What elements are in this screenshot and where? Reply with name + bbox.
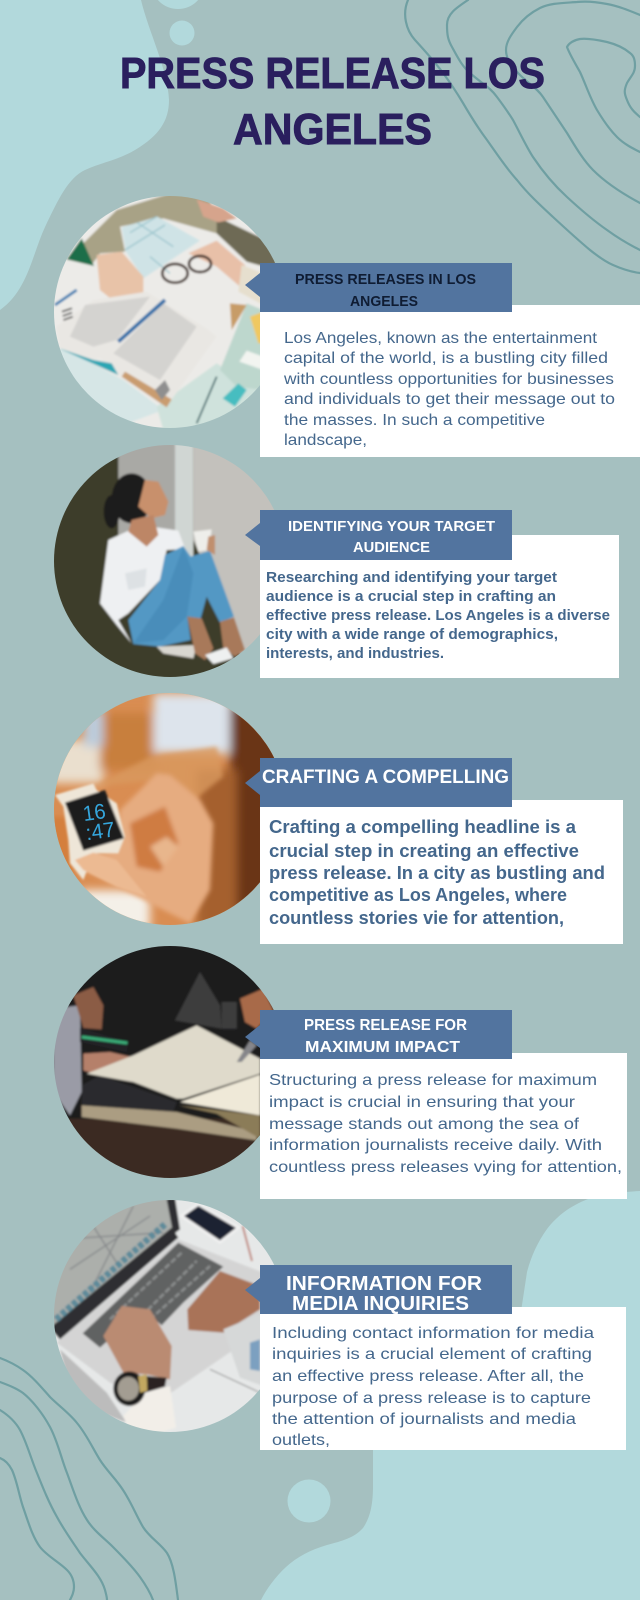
heading 4: MAXIMUM IMPACT: [305, 1039, 460, 1056]
panel 5: body box: [260, 1307, 626, 1450]
heading 1: PRESS RELEASES IN LOS: [295, 271, 476, 288]
watch face time: 16: [81, 799, 107, 826]
body text 3: [269, 817, 605, 928]
heading 3: CRAFTING A COMPELLING: [262, 767, 509, 788]
body text 5: the attention of journalists and media: [272, 1411, 576, 1428]
panel 5: header bar: [245, 1265, 512, 1315]
photo: open book with glasses on desk: [54, 196, 275, 428]
body text 1: and individuals to get their message out to: [284, 391, 615, 408]
panel 3: body box: [260, 800, 623, 944]
body text 3: Crafting a compelling headline is a: [269, 817, 577, 837]
photo: hands writing in notebook: [54, 946, 274, 1178]
top circles: [151, 0, 205, 46]
body text 3: countless stories vie for attention,: [269, 908, 564, 928]
heading 5: MEDIA INQUIRIES: [292, 1293, 469, 1315]
body text 2: Researching and identifying your target: [266, 569, 557, 586]
heading 2: IDENTIFYING YOUR TARGET: [288, 518, 495, 535]
panel 4: body box: [260, 1053, 627, 1199]
heading 1: [295, 271, 476, 310]
body text 2: city with a wide range of demographics,: [266, 626, 558, 643]
photo: hand touching smartwatch: [54, 693, 274, 925]
body text 4: countless press releases vying for attention,: [269, 1159, 622, 1176]
heading 5: [286, 1273, 483, 1315]
heading 2: [288, 518, 495, 556]
body text 2: [266, 569, 610, 662]
body text 2: effective press release. Los Angeles is a diverse: [266, 607, 610, 624]
panel 1: body box: [260, 305, 640, 457]
panel 4: header bar: [245, 1010, 512, 1059]
photo: hands typing on laptop: [54, 1200, 274, 1432]
body text 1: with countless opportunities for businesses: [283, 371, 614, 388]
body text 4: Structuring a press release for maximum: [269, 1072, 597, 1089]
watch face time: :47: [84, 817, 116, 845]
panel 3: header bar: [245, 758, 512, 807]
watch face time: [84, 804, 113, 840]
body text 1: capital of the world, is a bustling city filled: [284, 350, 608, 367]
body text 3: crucial step in creating an effective: [269, 841, 579, 861]
body text 4: information journalists receive daily. With: [269, 1137, 602, 1154]
body text 5: outlets,: [272, 1432, 330, 1449]
body text 5: [272, 1325, 594, 1449]
body text 4: impact is crucial in ensuring that your: [269, 1094, 576, 1111]
top-left light blob: [0, 0, 169, 310]
body text 2: audience is a crucial step in crafting an: [266, 588, 556, 605]
panel 1: header bar: [245, 263, 512, 312]
panel 2: header bar: [245, 510, 512, 560]
bottom circle: [288, 1480, 330, 1522]
body text 5: an effective press release. After all, the: [272, 1368, 584, 1385]
body text 2: interests, and industries.: [266, 645, 444, 662]
title: PRESS RELEASE LOS: [120, 49, 545, 98]
heading 1: ANGELES: [350, 293, 418, 310]
body text 1: the masses. In such a competitive: [284, 412, 545, 429]
heading 4: PRESS RELEASE FOR: [304, 1017, 467, 1034]
body text 3: press release. In a city as bustling and: [269, 863, 605, 883]
body text 1: [283, 330, 615, 449]
body text 4: [269, 1072, 622, 1176]
title: ANGELES: [233, 105, 432, 154]
heading 4: [304, 1017, 467, 1056]
body text 5: Including contact information for media: [272, 1325, 594, 1342]
title: [120, 49, 545, 154]
body text 3: competitive as Los Angeles, where: [269, 885, 567, 905]
top-right contour lines: [405, 0, 640, 273]
photo: woman sitting with coffee: [54, 445, 274, 677]
body text 5: inquiries is a crucial element of crafting: [272, 1346, 592, 1363]
body text 1: landscape,: [284, 432, 367, 449]
panel 2: body box: [260, 535, 619, 678]
body text 1: Los Angeles, known as the entertainment: [284, 330, 598, 347]
bottom-right light blob: [261, 1191, 640, 1600]
bottom-left contour lines: [0, 1358, 178, 1600]
heading 2: AUDIENCE: [353, 539, 430, 556]
body text 4: message stands out among the sea of: [269, 1116, 580, 1133]
body text 5: purpose of a press release is to capture: [272, 1390, 591, 1407]
heading 5: INFORMATION FOR: [286, 1273, 483, 1295]
